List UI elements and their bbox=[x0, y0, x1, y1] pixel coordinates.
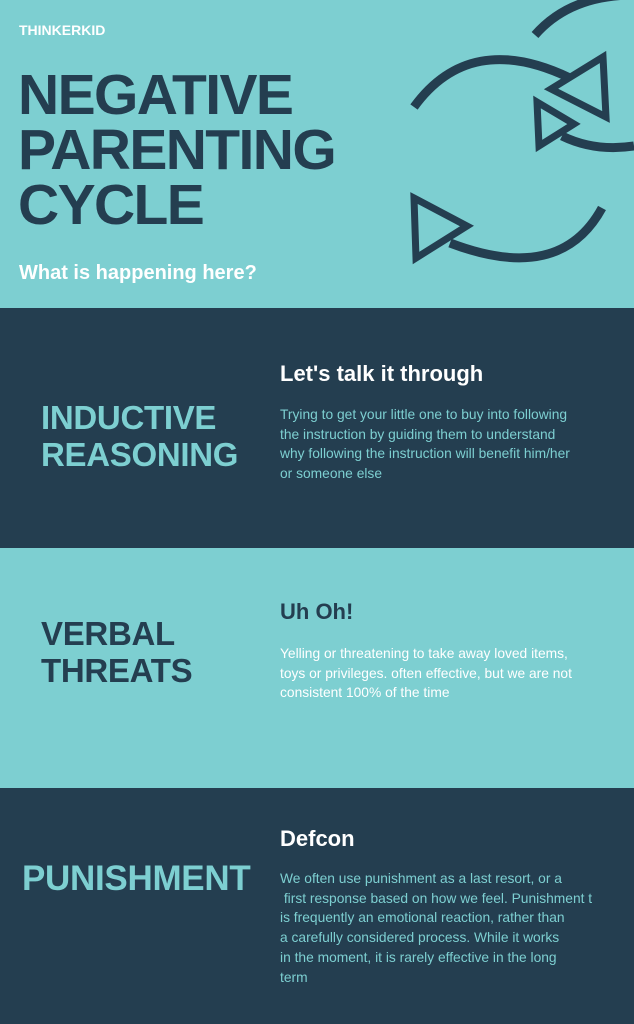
heading: VERBAL bbox=[41, 615, 175, 652]
title bbox=[18, 63, 335, 237]
title: NEGATIVE bbox=[18, 63, 292, 127]
text: We often use punishment as a last resort, or a bbox=[280, 871, 562, 886]
text: toys or privileges. often effective, but we are not bbox=[280, 666, 572, 681]
subheading: Uh Oh! bbox=[280, 599, 353, 624]
heading bbox=[41, 615, 192, 689]
heading: INDUCTIVE bbox=[41, 399, 216, 436]
text: or someone else bbox=[280, 466, 382, 481]
panel: punishment bbox=[0, 788, 634, 1024]
text: in the moment, it is rarely effective in the long bbox=[280, 950, 557, 965]
heading: REASONING bbox=[41, 436, 238, 473]
text bbox=[280, 871, 592, 985]
icon: cycle arrows bbox=[410, 0, 634, 264]
section: header bbox=[0, 0, 634, 308]
text: the instruction by guiding them to understand bbox=[280, 427, 555, 442]
panel: verbal threats bbox=[0, 548, 634, 788]
heading: THREATS bbox=[41, 652, 192, 689]
text bbox=[280, 407, 570, 481]
heading: PUNISHMENT bbox=[22, 859, 250, 898]
title: PARENTING bbox=[18, 118, 335, 182]
text: a carefully considered process. While it works bbox=[280, 930, 559, 945]
text: Trying to get your little one to buy into following bbox=[280, 407, 567, 422]
text: consistent 100% of the time bbox=[280, 685, 450, 700]
text: term bbox=[280, 970, 308, 985]
text: why following the instruction will benefit him/her bbox=[280, 446, 570, 461]
text: Yelling or threatening to take away loved items, bbox=[280, 646, 568, 661]
panel: inductive reasoning bbox=[0, 308, 634, 548]
brand: THINKERKID bbox=[19, 22, 105, 38]
subheading: Let's talk it through bbox=[280, 361, 483, 386]
heading bbox=[41, 399, 238, 473]
subheading: Defcon bbox=[280, 826, 355, 851]
text: first response based on how we feel. Punishment t bbox=[284, 891, 592, 906]
text bbox=[280, 646, 572, 700]
title: CYCLE bbox=[18, 173, 203, 237]
subtitle: What is happening here? bbox=[19, 262, 257, 284]
text: is frequently an emotional reaction, rather than bbox=[280, 910, 565, 925]
